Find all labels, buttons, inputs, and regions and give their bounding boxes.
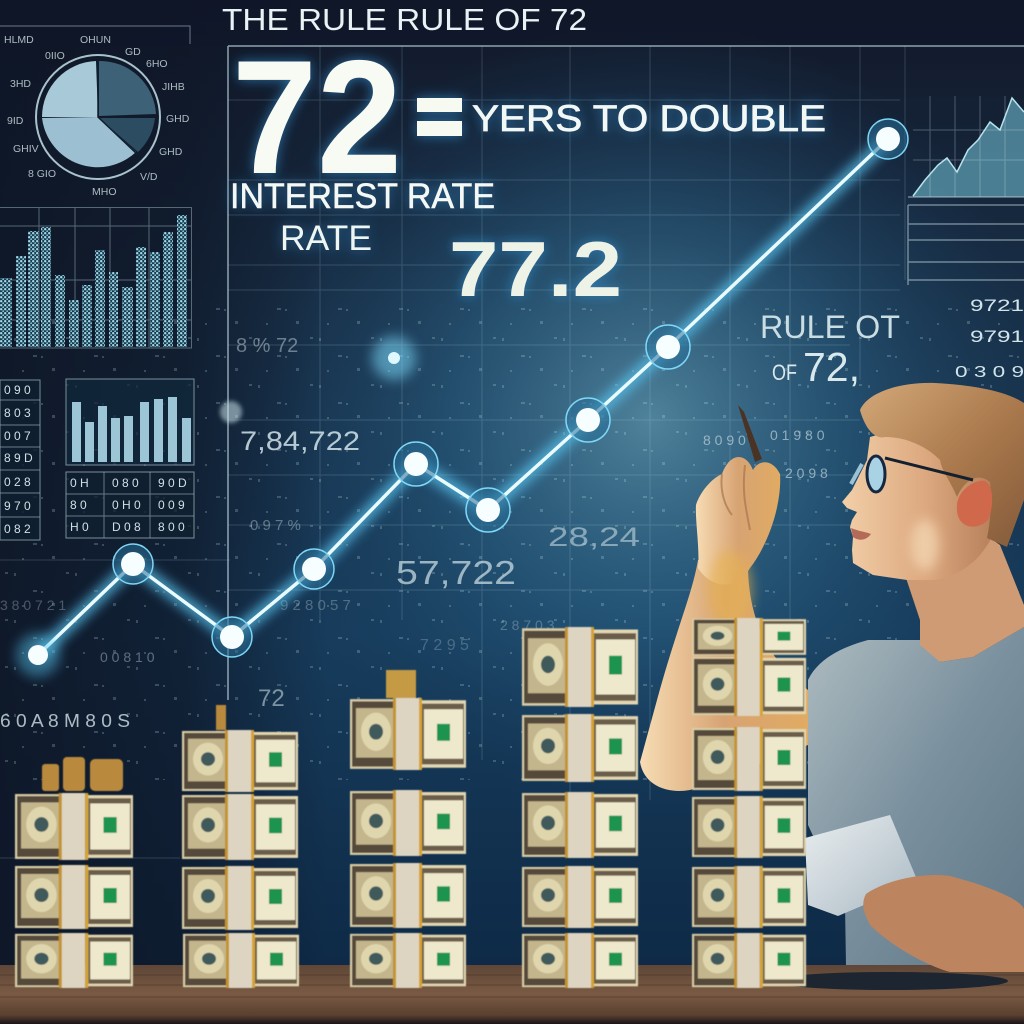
panel: lower data table: H 0 — [70, 520, 89, 534]
of 72 label: OF — [772, 360, 797, 385]
panel: lower data table: 0 H 0 — [112, 498, 141, 512]
panel: pie chart — [0, 26, 190, 198]
hand — [696, 457, 780, 584]
pie labels: GD — [125, 46, 141, 58]
panel: lower data table: 0 8 0 — [112, 476, 139, 490]
pencil — [738, 405, 762, 462]
panel: lower data table: 9 0 D — [158, 476, 187, 490]
stack of money 3 — [350, 670, 466, 988]
growth line chart — [16, 119, 908, 677]
cheek highlight — [911, 519, 939, 571]
panel: left data table — [0, 380, 40, 540]
scattered numbers: 2 0 9 8 — [785, 465, 828, 481]
scattered numbers: 9 8 M 9 8 8 — [900, 819, 960, 833]
scattered numbers: 7 2 9 5 — [420, 637, 469, 654]
pie labels: 6HO — [146, 58, 168, 70]
scattered numbers: 8 0 9 0 — [703, 432, 746, 448]
panel: lower data table: 0 H — [70, 476, 89, 490]
panel: right area chart — [908, 96, 1024, 285]
person: neck — [905, 510, 1024, 662]
rate label: RATE — [280, 219, 372, 258]
stack of money 5 — [692, 618, 806, 988]
panel: lower data table: 8 0 — [70, 498, 87, 512]
pie labels: OHUN — [80, 34, 111, 46]
pie labels: MHO — [92, 186, 116, 198]
title: THE RULE RULE OF 72 — [222, 2, 587, 37]
mouth — [851, 528, 871, 540]
panel: left data table: 0 0 7 — [4, 429, 31, 443]
panel: left data table: 8 9 D — [4, 451, 33, 465]
data points — [16, 119, 908, 677]
glasses — [851, 456, 973, 492]
panel: left data table: 0 2 8 — [4, 475, 31, 489]
pie labels: GHD — [159, 146, 183, 158]
scattered numbers: 2 8 7 0 3 — [500, 617, 555, 633]
person: arm raised — [640, 405, 808, 791]
panel: lower data table: D 0 8 — [112, 520, 141, 534]
scattered numbers: 28,24 — [548, 522, 640, 552]
scattered numbers: 7,84,722 — [240, 426, 360, 456]
panel: lower data table — [66, 472, 194, 538]
scattered numbers: 0 9 7 % — [250, 517, 301, 534]
ear — [957, 481, 992, 527]
pie labels: 9ID — [7, 115, 24, 127]
scattered numbers: 6 0 A 8 M 8 0 S — [0, 711, 130, 731]
stack of money 1 — [15, 757, 133, 988]
pie labels: V/D — [140, 171, 158, 183]
pie labels: JIHB — [162, 81, 185, 93]
table — [0, 965, 1024, 1024]
stack of money 2 — [182, 705, 299, 988]
rule of label: RULE OT — [760, 309, 900, 345]
formula result text: YERS TO DOUBLE — [472, 98, 826, 139]
panel: left data table: 0 8 2 — [4, 522, 31, 536]
panel: small bar chart — [66, 379, 194, 465]
pie labels: 8 GIO — [28, 168, 56, 180]
scattered numbers: 9721 — [970, 296, 1024, 315]
scattered numbers: 72 — [258, 685, 285, 712]
golden sparkle on wrist — [708, 550, 752, 630]
scattered numbers: 9 2 8 0 5 7 — [280, 597, 351, 614]
interest rate label: INTEREST RATE — [230, 177, 495, 216]
finger lines — [721, 465, 750, 530]
scattered numbers: 9791 — [970, 327, 1024, 346]
hair — [860, 383, 1024, 547]
scattered numbers — [0, 296, 1024, 833]
panel: lower data table: 8 0 0 — [158, 520, 185, 534]
scattered numbers: 0 3 0 9 — [955, 364, 1024, 381]
coins — [42, 757, 123, 791]
of 72 label: 72, — [803, 344, 860, 390]
pie labels: GHIV — [13, 143, 39, 155]
person: lower hand — [863, 875, 1024, 972]
pie labels: GHD — [166, 113, 190, 125]
person: shirt — [808, 627, 1024, 965]
panel: left data table: 8 0 3 — [4, 406, 31, 420]
main frame line — [228, 46, 1024, 700]
of 72 label — [772, 344, 860, 390]
light flares — [220, 336, 416, 423]
value 77.2: 77.2 — [449, 225, 622, 313]
person: head — [842, 383, 1024, 580]
scattered numbers: 0 0 8 1 0 — [100, 649, 155, 665]
scattered numbers: 0 1 9 8 0 — [770, 427, 825, 443]
stack of money 4 — [522, 627, 638, 988]
paper notebook — [805, 815, 918, 916]
panel: dotted bar chart — [0, 207, 192, 348]
pie labels: HLMD — [4, 34, 34, 46]
scattered numbers: 3 8 0 7 2 1 — [0, 597, 66, 613]
pie labels: 3HD — [10, 78, 31, 90]
panel: left data table: 0 9 0 — [4, 383, 31, 397]
scattered numbers: 57,722 — [396, 554, 516, 591]
icon: pie chart — [36, 55, 160, 179]
equals sign — [417, 98, 462, 136]
pie labels: 0IIO — [45, 50, 65, 62]
panel: left data table: 9 7 0 — [4, 499, 31, 513]
panel: lower data table: 0 0 9 — [158, 498, 185, 512]
grid lines — [0, 46, 905, 858]
scattered numbers: 8 % 72 — [236, 335, 298, 357]
formula number 72: 72 — [232, 27, 402, 208]
pie labels — [4, 34, 190, 198]
